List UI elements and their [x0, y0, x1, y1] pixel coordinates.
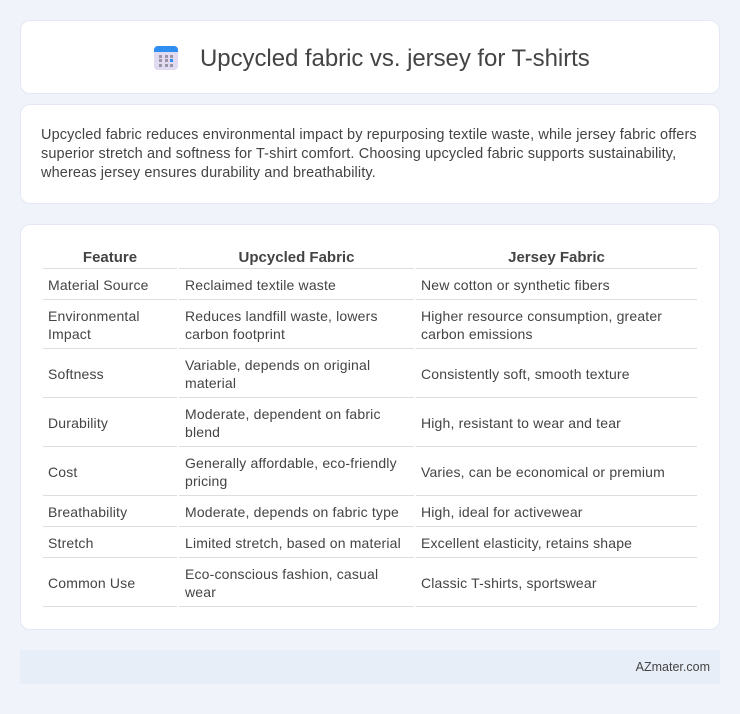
row: Breathability: Breathability: [48, 504, 127, 520]
text: Eco-conscious fashion, casual: [185, 566, 378, 582]
text: Excellent elasticity, retains shape: [421, 535, 632, 551]
row: Environmental Impact: Impact: [48, 326, 91, 342]
intro paragraph: [41, 127, 697, 181]
text: High, resistant to wear and tear: [421, 415, 621, 431]
row: Material Source: Material Source: [48, 277, 149, 293]
text: Consistently soft, smooth texture: [421, 366, 630, 382]
text: High, ideal for activewear: [421, 504, 583, 520]
row: Softness: Softness: [48, 366, 104, 382]
row: Stretch: Stretch: [48, 535, 94, 551]
panel: comparison table: [20, 224, 720, 630]
text: Moderate, dependent on fabric: [185, 406, 381, 422]
text: Reduces landfill waste, lowers: [185, 308, 378, 324]
footer bar: [20, 650, 720, 684]
intro paragraph: superior stretch and softness for T-shirt comfort. Choosing upcycled fabric supports sustainability,: [41, 146, 676, 162]
row: Cost: Cost: [48, 464, 77, 480]
text: Moderate, depends on fabric type: [185, 504, 399, 520]
text: carbon footprint: [185, 326, 285, 342]
table header: Upcycled Fabric: Upcycled Fabric: [239, 249, 354, 266]
text: blend: [185, 424, 220, 440]
title: Upcycled fabric vs. jersey for T-shirts: [200, 45, 590, 72]
text: pricing: [185, 473, 227, 489]
text: Generally affordable, eco-friendly: [185, 455, 397, 471]
text: Varies, can be economical or premium: [421, 464, 665, 480]
intro paragraph: whereas jersey ensures durability and breathability.: [41, 165, 376, 181]
icon: calendar: [154, 46, 178, 70]
text: Reclaimed textile waste: [185, 277, 336, 293]
text: Classic T-shirts, sportswear: [421, 575, 597, 591]
text: material: [185, 375, 236, 391]
title card: [20, 20, 720, 94]
text: Limited stretch, based on material: [185, 535, 401, 551]
row: Environmental Impact: Environmental: [48, 308, 140, 324]
row: Common Use: Common Use: [48, 575, 135, 591]
row: Durability: Durability: [48, 415, 108, 431]
text: carbon emissions: [421, 326, 533, 342]
table header: Jersey Fabric: Jersey Fabric: [508, 249, 605, 266]
text: Higher resource consumption, greater: [421, 308, 662, 324]
footer credit: AZmater.com: [636, 660, 710, 674]
row: Environmental Impact: [48, 308, 140, 342]
intro text panel: [20, 104, 720, 204]
text: New cotton or synthetic fibers: [421, 277, 610, 293]
text: Variable, depends on original: [185, 357, 370, 373]
intro paragraph: Upcycled fabric reduces environmental impact by repurposing textile waste, while jersey fabric offers: [41, 127, 697, 143]
text: wear: [185, 584, 216, 600]
table header: Feature: Feature: [83, 249, 137, 266]
